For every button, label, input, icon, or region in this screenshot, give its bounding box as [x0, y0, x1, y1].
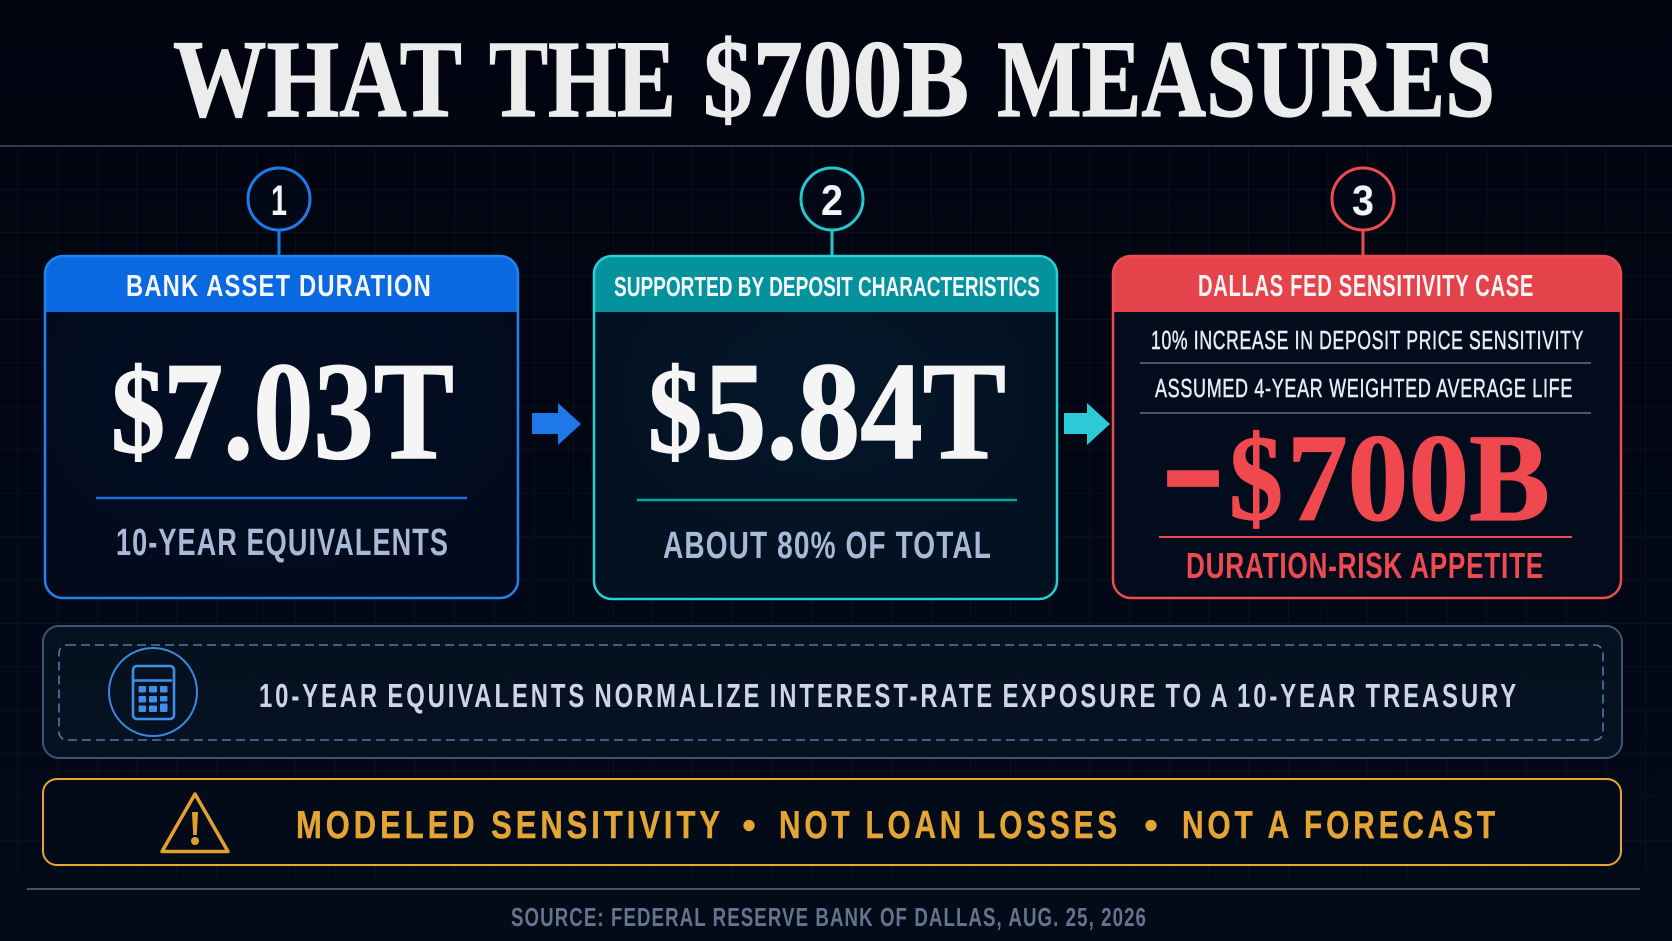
title: WHAT — [173, 18, 462, 140]
step marker 3: 3 — [1352, 177, 1374, 225]
panel: caveat banner — [43, 779, 1621, 865]
panel: deposit characteristics — [594, 256, 1057, 599]
panel: dallas fed sensitivity case — [1113, 256, 1621, 598]
caveat text — [296, 804, 1499, 847]
title: $700B — [703, 18, 969, 140]
big number: $ — [111, 344, 165, 479]
icon: warning triangle — [162, 794, 228, 852]
caption: 10-YEAR EQUIVALENTS — [116, 522, 449, 564]
step marker 1: 1 — [271, 177, 287, 225]
caveat text: • — [1144, 805, 1158, 847]
panel: definition note — [43, 626, 1622, 758]
panel heading: BANK ASSET DURATION — [126, 269, 432, 303]
caveat text: NOT LOAN LOSSES — [779, 804, 1121, 847]
result figure — [1165, 398, 1550, 548]
step marker 2: 2 — [821, 177, 843, 225]
panel heading: SUPPORTED BY DEPOSIT CHARACTERISTICS — [614, 271, 1040, 302]
result caption: DURATION-RISK APPETITE — [1186, 545, 1544, 586]
caption: ABOUT 80% OF TOTAL — [663, 525, 992, 567]
big number: 7.03T — [163, 334, 454, 489]
arrow 2 to 3 — [1064, 403, 1110, 445]
title — [173, 18, 1495, 140]
icon: calculator — [109, 648, 197, 736]
result figure: 700B — [1287, 410, 1550, 548]
caveat text: NOT A FORECAST — [1182, 804, 1499, 847]
step marker 2 — [801, 168, 863, 256]
title: MEASURES — [997, 18, 1495, 140]
step marker 3 — [1332, 168, 1394, 256]
title: THE — [489, 18, 676, 140]
source line: SOURCE: FEDERAL RESERVE BANK OF DALLAS, AUG. 25, 2026 — [511, 902, 1147, 932]
caveat text: MODELED SENSITIVITY — [296, 804, 724, 847]
result figure: $ — [1229, 411, 1283, 546]
result figure: - — [1165, 398, 1221, 536]
big number: $ — [648, 344, 702, 479]
big number: 5.84T — [704, 334, 1006, 489]
arrow 1 to 2 — [532, 403, 581, 445]
caveat text: • — [742, 805, 756, 847]
panel: bank asset duration — [45, 256, 518, 598]
step marker 1 — [248, 168, 310, 256]
